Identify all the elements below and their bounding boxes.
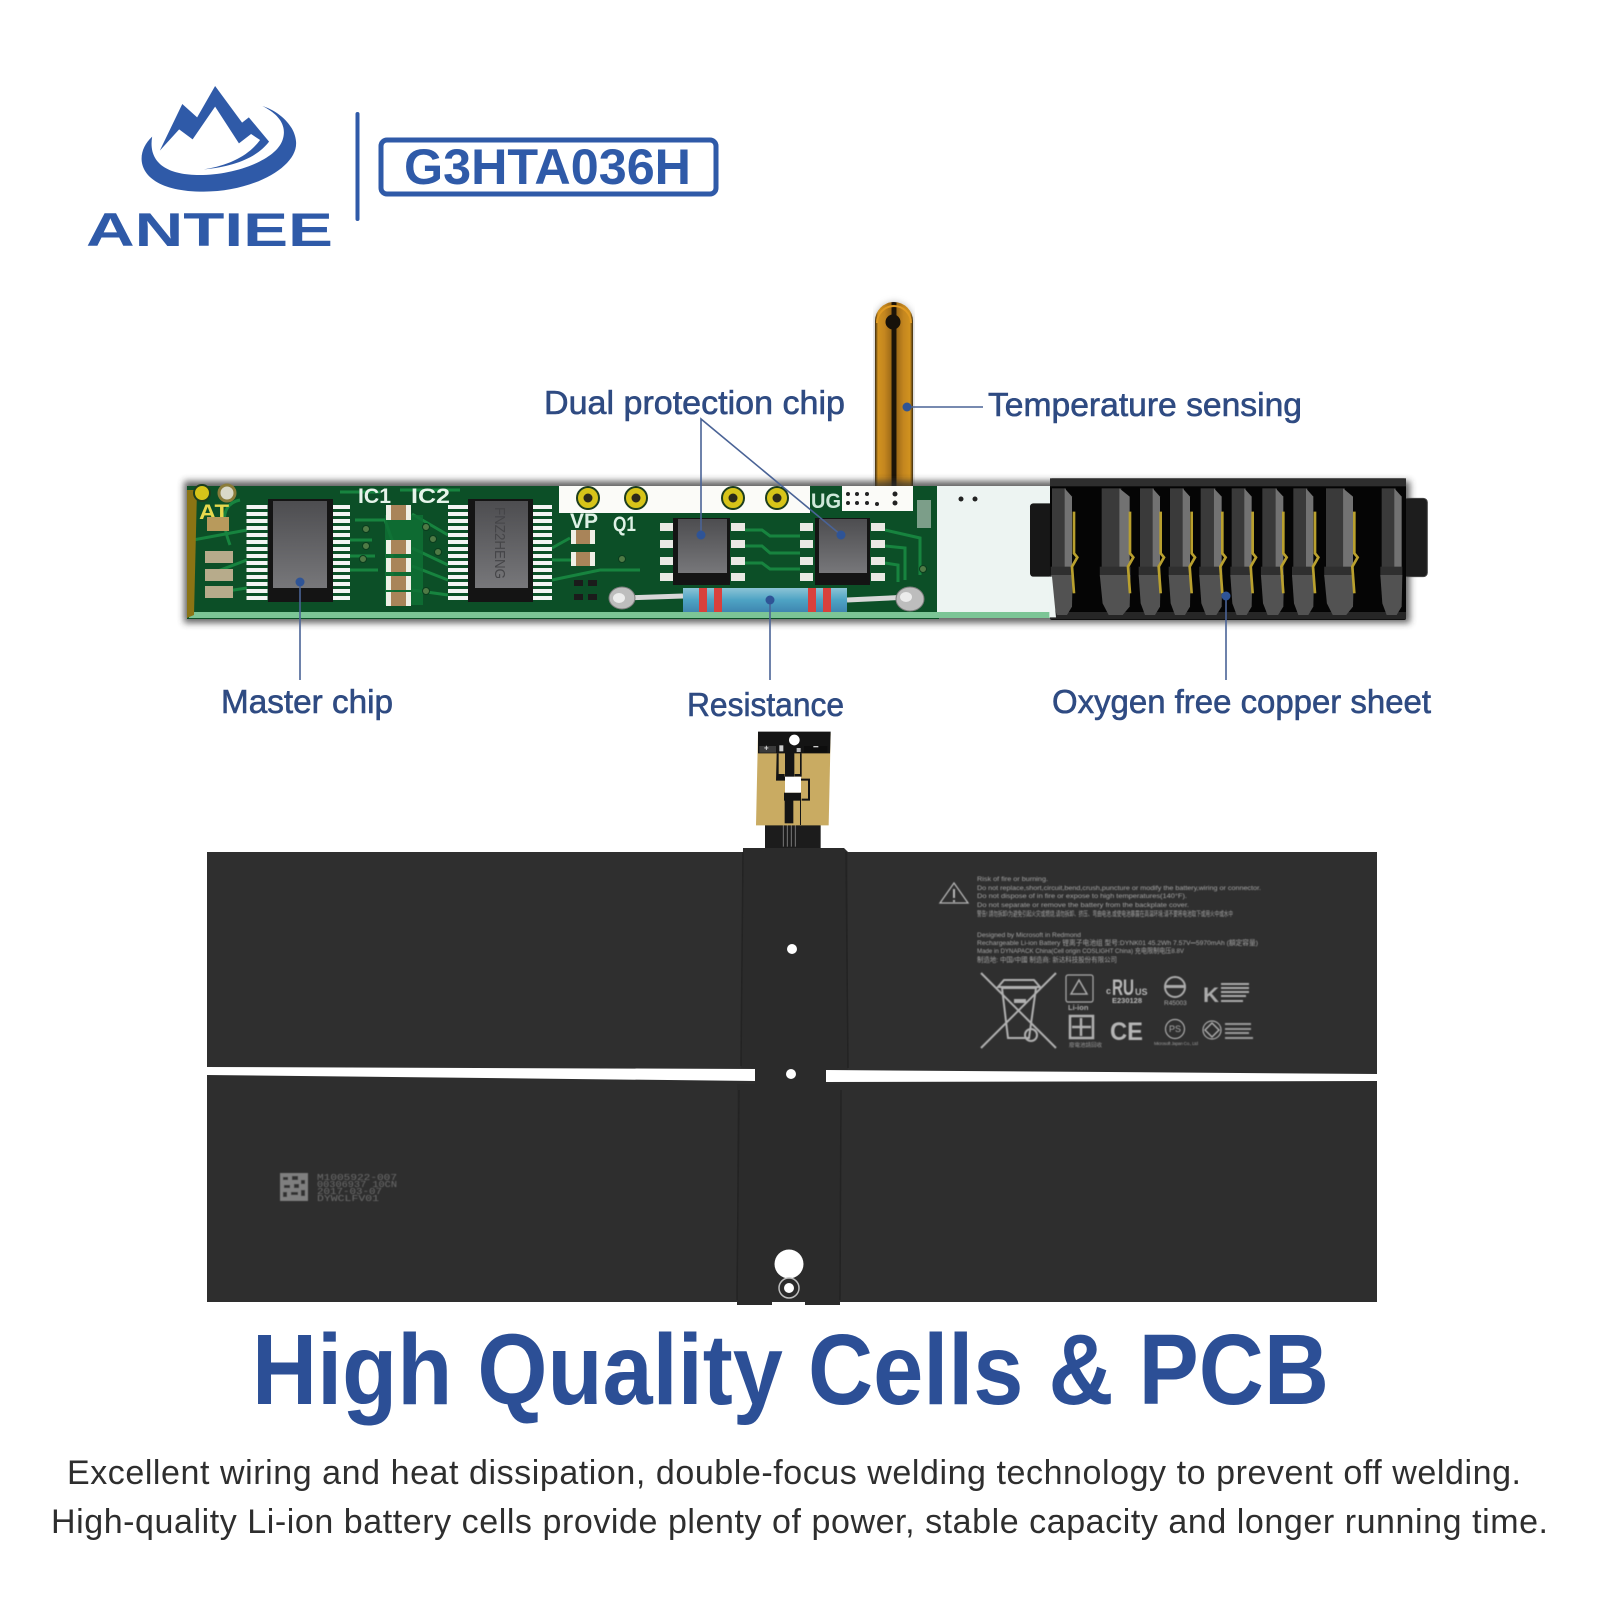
tape holes: [787, 944, 797, 954]
vias: [360, 524, 926, 594]
resistor with leads: [609, 587, 924, 612]
description text: High-quality Li-ion battery cells provide plenty of power, stable capacity and longer running time.: [51, 1503, 1548, 1541]
manufacturer text: Made in DYNAPACK China(Cell origin COSLIGHT China) 充电限制电压8.8V: [977, 946, 1185, 955]
capacitors: [386, 505, 597, 606]
serial text: 00306937 10CN: [317, 1180, 397, 1190]
lighter traces: [193, 490, 920, 600]
model number badge: G3HTA036H: [404, 139, 691, 195]
PCB board: IC2: [411, 485, 450, 508]
icon: PSE mark: [1154, 1020, 1198, 1046]
icon: cUL mark: RU: [1112, 975, 1134, 1000]
left gold edge: [187, 490, 197, 618]
second IC: FNZ2HENG: [491, 507, 508, 579]
battery flex connector: +: [764, 744, 769, 753]
icon: KC mark: [1203, 983, 1249, 1007]
manufacturer text: Designed by Microsoft in Redmond: [977, 932, 1081, 939]
warning text: Do not dispose of in fire or expose to high temperatures(140°F).: [977, 892, 1187, 900]
battery flex connector: [756, 732, 831, 850]
warning text: [977, 876, 1261, 918]
left SMD parts: [205, 517, 233, 598]
icon: cUL mark: c: [1106, 986, 1111, 996]
icon: cUL mark: US: [1135, 987, 1148, 997]
green board: [187, 486, 939, 619]
icon: cUL mark: E230128: [1112, 996, 1142, 1005]
connector pad patch: [842, 486, 913, 511]
description text: Excellent wiring and heat dissipation, double-focus welding technology to prevent off welding.: [67, 1454, 1521, 1492]
manufacturer text: 制造地: 中国/中國 制造商: 新达科技股份有限公司: [977, 955, 1117, 964]
callout: master chip: Master chip: [221, 683, 393, 720]
connector housing: [1050, 478, 1406, 620]
battery pack: [207, 848, 1377, 1305]
warning text: Do not separate or remove the battery from the backplate cover.: [977, 902, 1189, 909]
warning text: 警告! 請勿拆卸/为避免引起火灾或燃烧,请勿拆卸、挤压、弯曲电池,或使电池暴露在高温环境;请不要将电池取下或用火中或水中: [977, 909, 1233, 918]
icon: cUL mark: [1106, 975, 1148, 1005]
centre tape strip: [737, 848, 848, 1305]
manufacturer text: Rechargeable Li-ion Battery 锂离子电池组 型号:DYNK01 45.2Wh 7.57V⎓5970mAh (額定容量): [977, 938, 1258, 947]
temperature sensor flex: [875, 302, 913, 486]
gold through holes: [194, 485, 788, 509]
icon: battery recycling mark: 廢電池請回收: [1069, 1041, 1103, 1049]
callout: resistance: Resistance: [687, 686, 844, 723]
QR code: [280, 1173, 308, 1201]
icon: crossed-out bin: [981, 973, 1056, 1048]
bottom board edge: [189, 612, 1059, 618]
warning text: Risk of fire or burning.: [977, 876, 1048, 883]
PCB board: VP: [570, 510, 598, 533]
warning text: Do not replace,short,circuit,bend,crush,puncture or modify the battery,wiring or connector.: [977, 885, 1261, 892]
battery warning label: [940, 876, 1261, 1049]
PCB board: IC1: [358, 485, 391, 508]
pale board corner: [1049, 577, 1056, 617]
black top band: [758, 732, 831, 753]
master chip: [257, 499, 340, 602]
PCB board: [184, 481, 1410, 623]
icon: BSMI mark: [1164, 977, 1187, 1007]
callout: oxygen free copper sheet: [1052, 592, 1431, 720]
icon: mountain and swoosh: [142, 86, 296, 192]
callout: resistance: [687, 596, 844, 723]
PCB board: UG: [811, 490, 841, 513]
serial text: [317, 1173, 397, 1204]
lower cell: [207, 1075, 1377, 1302]
icon: PSE mark: PS: [1169, 1024, 1181, 1034]
silkscreen labels: AT: [199, 501, 229, 524]
black traces: [776, 752, 810, 825]
icon: CE mark: CE: [1110, 1018, 1143, 1046]
serial text: M1005922-007: [317, 1173, 397, 1183]
icon: BSMI mark: R45003: [1164, 1000, 1187, 1007]
icon: Li-ion recycling: Li-ion: [1068, 1003, 1089, 1012]
gold pad area: [756, 733, 831, 825]
manufacturer text: [977, 932, 1258, 964]
logo: ANTIEE: [86, 86, 333, 256]
callout: dual protection chip: [544, 384, 846, 540]
connector side tabs: [1403, 498, 1427, 577]
icon: KC mark: K: [1203, 984, 1219, 1007]
callout: dual protection chip: Dual protection chip: [544, 384, 845, 421]
second IC: [458, 499, 542, 602]
description text: [51, 1454, 1548, 1541]
serial text: 2017-03-07: [317, 1187, 382, 1197]
title: High Quality Cells & PCB: [252, 1314, 1329, 1426]
icon: warning triangle: [940, 883, 968, 903]
callout: master chip: [221, 578, 393, 720]
pale board section: [937, 486, 1050, 612]
gold contacts: [1072, 512, 1358, 593]
icon: Li-ion recycling: [1066, 975, 1093, 1012]
logo divider: [356, 112, 360, 221]
white cut-out and hole: [785, 777, 801, 793]
small SMD parts right: [917, 500, 931, 528]
icon: battery recycling mark: [1069, 1016, 1103, 1049]
dual protection chips: [660, 518, 885, 585]
flex stem: [765, 822, 821, 850]
callout: oxygen free copper sheet: Oxygen free copper sheet: [1052, 683, 1431, 720]
PCB board: Q1: [613, 513, 636, 536]
battery connector: [1030, 478, 1427, 620]
icon: PSE mark: Microsoft Japan Co., Ltd: [1154, 1041, 1198, 1046]
icon: PSB diamond mark: [1203, 1021, 1253, 1039]
serial text: DYWCLFV01: [317, 1194, 379, 1204]
callout: temperature sensing: Temperature sensing: [988, 386, 1302, 423]
brand name: ANTIEE: [86, 203, 333, 256]
battery serial block: [280, 1173, 397, 1204]
connector fins: [1051, 488, 1402, 615]
white silkscreen strip: [559, 486, 810, 513]
board shadow: [184, 481, 1410, 623]
upper cell: [207, 852, 1377, 1074]
